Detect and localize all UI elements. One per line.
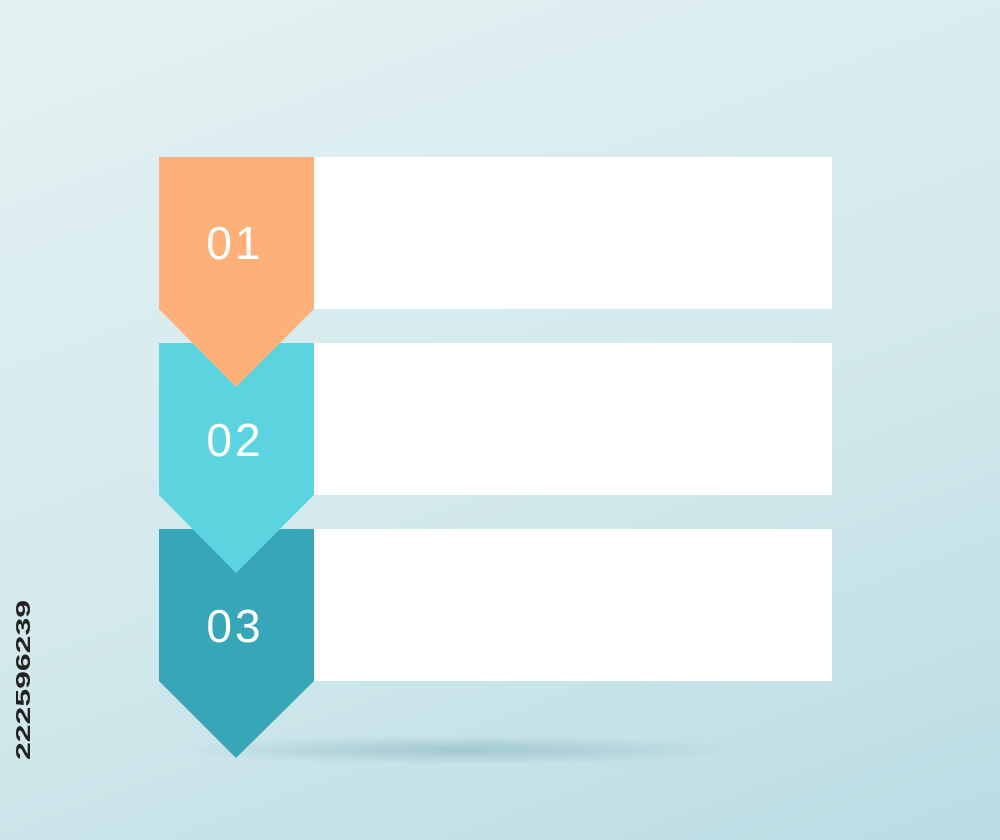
arrow 2: 02: [206, 414, 264, 466]
arrow 2: [159, 343, 314, 573]
shadow under list: [180, 735, 740, 765]
arrow 3: [159, 529, 314, 758]
panel: box 3: [314, 529, 832, 681]
arrow 3: 03: [206, 600, 264, 652]
side id text: 222596239: [13, 600, 35, 760]
panel: box 2: [314, 343, 832, 495]
arrow 1: [159, 157, 314, 387]
arrow 1: 01: [206, 217, 264, 269]
panel: box 1: [314, 157, 832, 309]
